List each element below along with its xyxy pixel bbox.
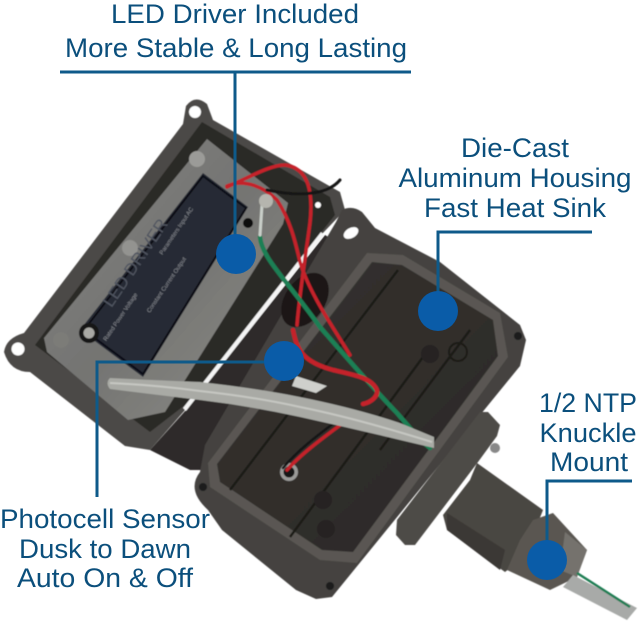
heading: die-cast housing: Fast Heat Sink: [424, 193, 607, 223]
LED driver module: Parameters Input AC: [159, 206, 196, 256]
leader line: LED driver: [60, 72, 411, 254]
dark gap between lid and box: [150, 235, 350, 470]
heading: LED driver: [65, 0, 407, 63]
LED driver module: LED DRIVER: [99, 215, 172, 311]
threaded nut: [507, 513, 587, 590]
heading: die-cast housing: [398, 133, 632, 223]
heading: knuckle mount: [539, 388, 637, 477]
dark cavity behind wires: [271, 264, 339, 336]
gray sheathed cable: [108, 378, 434, 448]
box interior floor: [217, 262, 498, 552]
heading: die-cast housing: Aluminum Housing: [398, 163, 632, 193]
conduit pipe: [563, 575, 637, 620]
leader line: die-cast housing: [438, 232, 592, 311]
callout: knuckle mount: [527, 388, 637, 580]
heading: knuckle mount: Mount: [550, 447, 629, 477]
leader line: photocell sensor: [97, 362, 284, 497]
marker dot: photocell sensor: [264, 341, 304, 381]
LED driver module: Rated Power Voltage: [103, 292, 140, 342]
callout: die-cast housing: [398, 133, 632, 331]
heading: photocell sensor: Auto On & Off: [17, 563, 194, 593]
wire grommet: [280, 463, 298, 481]
heading: die-cast housing: Die-Cast: [461, 133, 570, 163]
lid screw posts: [189, 151, 205, 167]
white gap stripe: [183, 232, 324, 411]
box housing outer shell: [195, 208, 526, 599]
box rim: [208, 253, 508, 563]
interior ribs: [230, 270, 470, 537]
lid ear holes: [189, 106, 201, 118]
marker dot: die-cast housing: [418, 291, 458, 331]
callout: photocell sensor: [0, 341, 304, 593]
callout: LED driver: [60, 0, 411, 274]
LED driver module: [79, 173, 248, 377]
heading: knuckle mount: 1/2 NTP: [539, 388, 637, 418]
heading: LED driver: More Stable & Long Lasting: [65, 33, 407, 63]
photocell connector: [292, 376, 327, 393]
driver terminal screw: [243, 194, 273, 228]
lid of housing: [4, 99, 345, 450]
knuckle mount: [396, 412, 637, 620]
heading: photocell sensor: Dusk to Dawn: [19, 534, 191, 564]
heading: knuckle mount: Knuckle: [540, 418, 636, 448]
mounting plate: [396, 412, 500, 545]
interior bumps: [421, 345, 439, 363]
marker dot: LED driver: [216, 234, 256, 274]
leader line: knuckle mount: [547, 481, 632, 560]
heading: photocell sensor: [0, 504, 210, 593]
LED driver module: Constant Current Output: [146, 256, 188, 314]
marker dot: knuckle mount: [527, 540, 567, 580]
heading: photocell sensor: Photocell Sensor: [0, 504, 210, 534]
arm: [443, 463, 543, 572]
wires: [227, 165, 430, 470]
